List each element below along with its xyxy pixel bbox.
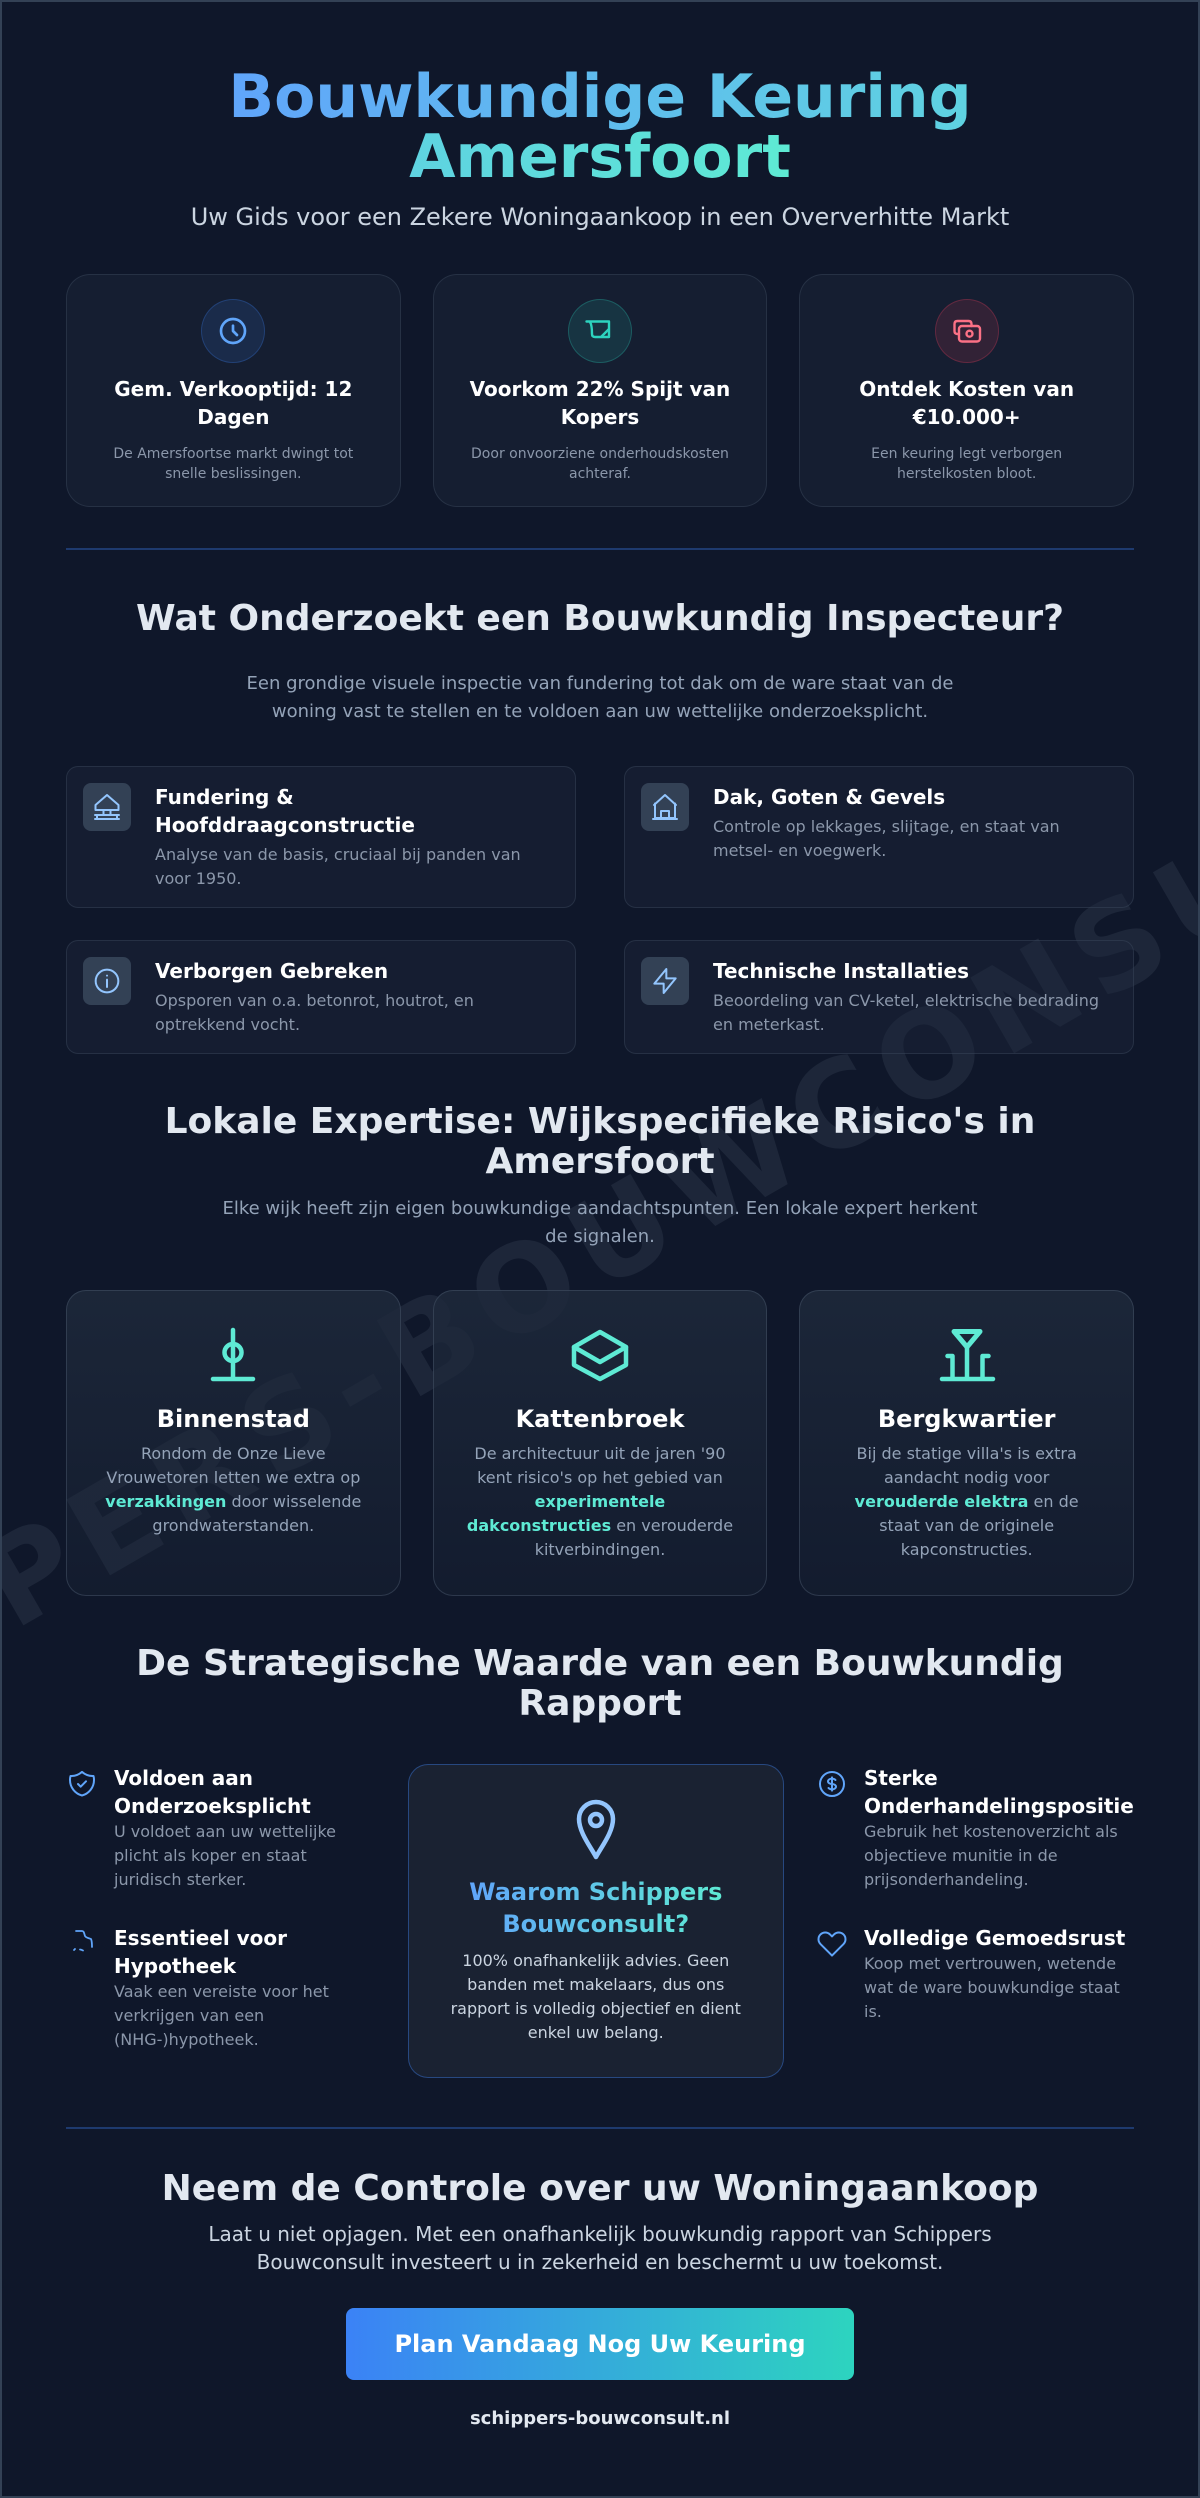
service text: Opsporen van o.a. betonrot, houtrot, en xyxy=(155,991,474,1010)
panel: bergkwartier xyxy=(799,1290,1134,1596)
callout heading: Waarom Schippers xyxy=(469,1878,722,1906)
neighbourhood text: kapconstructies. xyxy=(901,1540,1033,1559)
stat heading: Dagen xyxy=(197,404,269,428)
icon: shield xyxy=(69,1770,95,1796)
neighbourhood text: verzakkingen door wisselende xyxy=(105,1492,361,1511)
heading: lokale expertise: Amersfoort xyxy=(485,1141,715,1182)
intro text: inspecteur: Een grondige visuele inspectie van fundering tot dak om de ware staat van de xyxy=(247,673,953,694)
benefit text xyxy=(114,1982,329,2049)
panel: installaties xyxy=(624,940,1134,1054)
panel: verborgen gebreken xyxy=(66,940,576,1054)
icon: villa towers xyxy=(940,1329,996,1382)
icon: house xyxy=(641,783,689,831)
intro text: inspecteur: woning vast te stellen en te voldoen aan uw wettelijke onderzoeksplicht. xyxy=(272,701,928,722)
stat text: Een keuring legt verborgen xyxy=(871,446,1062,462)
benefit text: juridisch sterker. xyxy=(114,1870,246,1889)
stat heading: Ontdek Kosten van xyxy=(859,376,1074,400)
service heading: Verborgen Gebreken xyxy=(155,959,388,983)
service text xyxy=(155,991,474,1034)
benefit text: is. xyxy=(864,2002,882,2021)
icon: heart xyxy=(818,1932,846,1957)
title: Bouwkundige Keuring xyxy=(228,62,972,132)
benefit text: Gebruik het kostenoverzicht als xyxy=(864,1822,1118,1841)
service text: voor 1950. xyxy=(155,869,242,888)
service heading: Fundering & xyxy=(155,785,294,809)
heading: strategische waarde xyxy=(136,1643,1064,1724)
neighbourhood text: Bij de statige villa's is extra xyxy=(857,1444,1077,1463)
neighbourhood text: dakconstructies en verouderde xyxy=(467,1516,733,1535)
call to action text xyxy=(66,2220,1134,2276)
stat heading: €10.000+ xyxy=(913,404,1021,428)
service text xyxy=(713,991,1099,1034)
callout text: enkel uw belang. xyxy=(528,2023,664,2042)
stat text: achteraf. xyxy=(569,466,631,482)
icon: bolt xyxy=(641,957,689,1005)
intro text: lokale expertise xyxy=(222,1198,978,1246)
stat text: herstelkosten bloot. xyxy=(897,466,1036,482)
benefit heading: Hypotheek xyxy=(114,1954,236,1978)
intro text: lokale expertise: Elke wijk heeft zijn eigen bouwkundige aandachtspunten. Een lokale expert herkent xyxy=(222,1198,978,1218)
benefit text: Koop met vertrouwen, wetende xyxy=(864,1954,1116,1973)
stat heading: Voorkom 22% Spijt van xyxy=(470,376,730,400)
neighbourhood text: staat van de originele xyxy=(879,1516,1054,1535)
benefit text: U voldoet aan uw wettelijke xyxy=(114,1822,336,1841)
heading: strategische waarde: De Strategische Waarde van een Bouwkundig xyxy=(136,1643,1064,1684)
neighbourhood text: Vrouwetoren letten we extra op xyxy=(106,1468,360,1487)
benefit text: (NHG-)hypotheek. xyxy=(114,2030,259,2049)
neighbourhood text: kitverbindingen. xyxy=(535,1540,665,1559)
neighbourhood heading: Binnenstad xyxy=(157,1405,310,1433)
benefit text: Vaak een vereiste voor het xyxy=(114,1982,329,2001)
stat heading xyxy=(114,376,352,428)
call to action text: Bouwconsult investeert u in zekerheid en beschermt u uw toekomst. xyxy=(257,2250,943,2274)
neighbourhood text: Rondom de Onze Lieve xyxy=(141,1444,326,1463)
heading: inspecteur: Wat Onderzoekt een Bouwkundig Inspecteur? xyxy=(136,598,1064,638)
panel: stat spijt xyxy=(433,274,767,507)
stat text: De Amersfoortse markt dwingt tot xyxy=(113,446,353,462)
benefit heading: Sterke xyxy=(864,1766,938,1790)
button xyxy=(346,2308,854,2380)
icon: dollar xyxy=(819,1771,845,1797)
panel: binnenstad xyxy=(66,1290,401,1596)
service text: metsel- en voegwerk. xyxy=(713,841,886,860)
stat text: Door onvoorziene onderhoudskosten xyxy=(471,446,729,462)
website link: schippers-bouwconsult.nl xyxy=(470,2408,730,2429)
callout heading: Bouwconsult? xyxy=(502,1910,689,1938)
intro text: inspecteur xyxy=(247,673,953,722)
callout text: banden met makelaars, dus ons xyxy=(467,1975,724,1994)
benefit text: plicht als koper en staat xyxy=(114,1846,307,1865)
benefit heading xyxy=(114,1766,311,1818)
subtitle: Uw Gids voor een Zekere Woningaankoop in een Oververhitte Markt xyxy=(191,203,1009,231)
benefit heading: Onderzoeksplicht xyxy=(114,1794,311,1818)
icon: regret tray xyxy=(568,299,632,363)
service heading: Technische Installaties xyxy=(713,959,969,983)
panel: kattenbroek xyxy=(433,1290,767,1596)
heading: strategische waarde: Rapport xyxy=(518,1683,682,1724)
benefit: onderzoeksplicht xyxy=(69,1766,336,1889)
service text: Controle op lekkages, slijtage, en staat van xyxy=(713,817,1060,836)
benefit heading: Voldoen aan xyxy=(114,1766,253,1790)
benefit text: objectieve munitie in de xyxy=(864,1846,1058,1865)
benefit text xyxy=(114,1822,336,1889)
button: Plan Vandaag Nog Uw Keuring xyxy=(394,2330,806,2358)
heading: lokale expertise xyxy=(165,1101,1035,1182)
service text xyxy=(155,845,521,888)
stat text xyxy=(113,446,353,482)
benefit heading: Volledige Gemoedsrust xyxy=(864,1926,1125,1950)
service text xyxy=(713,817,1060,860)
stat text xyxy=(871,446,1062,482)
benefit text xyxy=(864,1822,1118,1889)
panel: dak xyxy=(624,766,1134,908)
panel: stat verkooptijd xyxy=(66,274,401,507)
benefit text: verkrijgen van een xyxy=(114,2006,264,2025)
heading: lokale expertise: Lokale Expertise: Wijkspecifieke Risico's in xyxy=(165,1101,1035,1142)
service text: optrekkend vocht. xyxy=(155,1015,300,1034)
panel: fundering xyxy=(66,766,576,908)
callout heading xyxy=(469,1878,722,1938)
stat heading xyxy=(470,376,730,428)
neighbourhood text xyxy=(467,1444,733,1559)
icon: box xyxy=(572,1330,628,1382)
benefit heading: Onderhandelingspositie xyxy=(864,1794,1134,1818)
service heading: Hoofddraagconstructie xyxy=(155,813,415,837)
neighbourhood text: verouderde elektra en de xyxy=(855,1492,1079,1511)
service heading: Dak, Goten & Gevels xyxy=(713,785,945,809)
callout text xyxy=(451,1951,741,2042)
stat text: snelle beslissingen. xyxy=(165,466,302,482)
stat heading: Gem. Verkooptijd: 12 xyxy=(114,376,352,400)
callout text: 100% onafhankelijk advies. Geen xyxy=(462,1951,729,1970)
neighbourhood text: De architectuur uit de jaren '90 xyxy=(474,1444,726,1463)
service text: en meterkast. xyxy=(713,1015,825,1034)
neighbourhood text xyxy=(854,1444,1079,1559)
benefit heading xyxy=(864,1766,1134,1818)
benefit heading: Essentieel voor xyxy=(114,1926,287,1950)
stat text xyxy=(471,446,729,482)
call to action text: Laat u niet opjagen. Met een onafhankelijk bouwkundig rapport van Schippers xyxy=(208,2222,992,2246)
service heading xyxy=(155,785,415,837)
service text: Beoordeling van CV-ketel, elektrische bedrading xyxy=(713,991,1099,1010)
icon: foundation house xyxy=(83,783,131,831)
stat heading xyxy=(859,376,1074,428)
title xyxy=(228,62,972,192)
benefit text: prijsonderhandeling. xyxy=(864,1870,1029,1889)
benefit text: wat de ware bouwkundige staat xyxy=(864,1978,1120,1997)
neighbourhood text: grondwaterstanden. xyxy=(152,1516,314,1535)
heading: call to action: Neem de Controle over uw Woningaankoop xyxy=(162,2168,1038,2208)
neighbourhood text: kent risico's op het gebied van xyxy=(477,1468,723,1487)
benefit text xyxy=(864,1954,1120,2021)
icon: tower xyxy=(210,1328,256,1382)
intro text: lokale expertise: de signalen. xyxy=(545,1226,655,1246)
benefit: gemoedsrust xyxy=(818,1926,1125,2021)
icon: info xyxy=(83,957,131,1005)
benefit heading xyxy=(114,1926,287,1978)
icon: cash xyxy=(935,299,999,363)
neighbourhood heading: Bergkwartier xyxy=(878,1405,1055,1433)
neighbourhood text xyxy=(105,1444,361,1535)
panel: stat kosten xyxy=(799,274,1134,507)
neighbourhood heading: Kattenbroek xyxy=(516,1405,684,1433)
icon: clock xyxy=(201,299,265,363)
callout text: rapport is volledig objectief en dient xyxy=(451,1999,741,2018)
title: Amersfoort xyxy=(409,122,791,192)
icon: map pin xyxy=(576,1800,616,1860)
panel: waarom schippers xyxy=(408,1764,784,2078)
stat heading: Kopers xyxy=(561,404,639,428)
service text: Analyse van de basis, cruciaal bij panden van xyxy=(155,845,521,864)
neighbourhood text: experimentele xyxy=(535,1492,665,1511)
benefit: hypotheek xyxy=(73,1926,329,2049)
icon: partial document xyxy=(73,1930,93,1952)
benefit: onderhandelingspositie xyxy=(819,1766,1134,1889)
neighbourhood text: aandacht nodig voor xyxy=(884,1468,1049,1487)
